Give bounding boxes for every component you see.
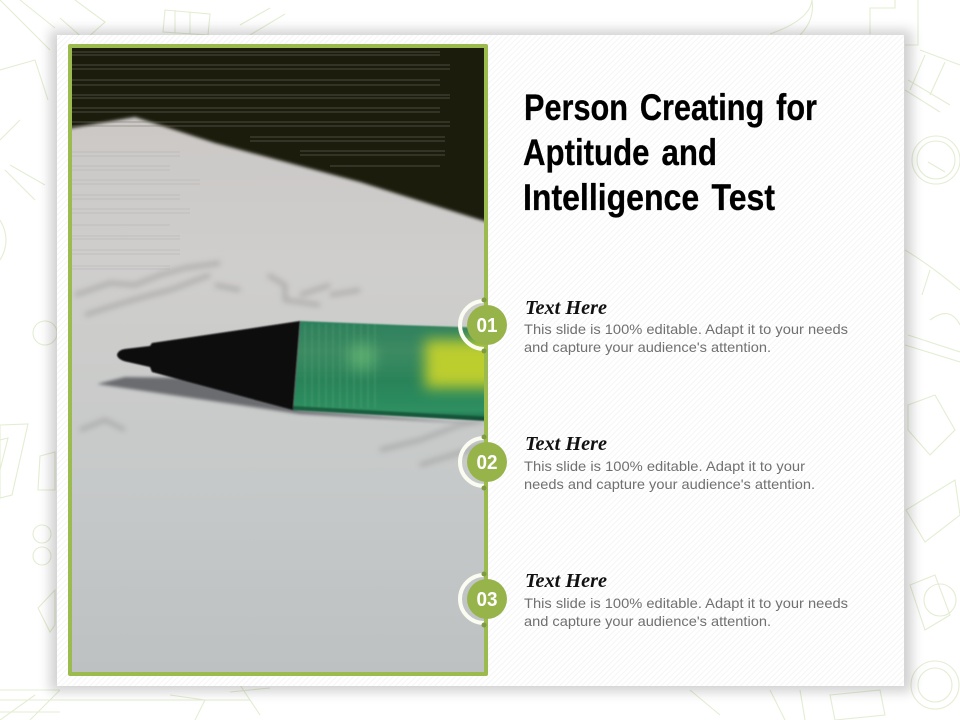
text 3 bbox=[524, 570, 848, 629]
text 2 bbox=[524, 433, 815, 492]
title bbox=[523, 87, 817, 218]
handwriting scribbles bbox=[75, 263, 484, 465]
badge 01 bbox=[460, 298, 507, 354]
text 3: Text Here bbox=[525, 570, 607, 592]
badge 02: 02 bbox=[476, 452, 498, 474]
dark background above paper bbox=[72, 48, 484, 224]
text 3: This slide is 100% editable. Adapt it to your needs bbox=[524, 595, 848, 611]
white hatched panel bbox=[57, 35, 904, 686]
pen shadow bbox=[97, 377, 484, 424]
green pen barrel bbox=[293, 321, 490, 421]
text 2: This slide is 100% editable. Adapt it to your bbox=[524, 458, 805, 474]
text 3: and capture your audience's attention. bbox=[524, 613, 771, 629]
text 2: needs and capture your audience's attention. bbox=[524, 476, 815, 492]
item 3 bbox=[460, 570, 848, 629]
text 2: Text Here bbox=[525, 433, 607, 455]
badge 03 bbox=[460, 572, 507, 628]
badge 02 bbox=[460, 434, 507, 490]
item 2 bbox=[460, 433, 815, 492]
title: Intelligence Test bbox=[523, 177, 775, 218]
black pen tip bbox=[117, 321, 300, 410]
scan lines bbox=[72, 52, 450, 269]
item 1 bbox=[460, 297, 848, 355]
text 1 bbox=[524, 297, 848, 355]
barrel yellow highlight bbox=[425, 340, 500, 388]
photo: pen on paper bbox=[72, 48, 484, 672]
text 1: This slide is 100% editable. Adapt it to your needs bbox=[524, 321, 848, 337]
photo frame bbox=[68, 44, 488, 676]
badge 03: 03 bbox=[476, 589, 498, 611]
barrel rib highlight bbox=[348, 343, 376, 371]
text 1: Text Here bbox=[525, 297, 607, 319]
barrel ribs bbox=[305, 324, 375, 408]
title: Aptitude and bbox=[523, 132, 717, 173]
barrel lower edge bbox=[293, 406, 490, 421]
text 1: and capture your audience's attention. bbox=[524, 339, 771, 355]
badge 01: 01 bbox=[476, 315, 498, 337]
title: Person Creating for bbox=[524, 87, 817, 128]
